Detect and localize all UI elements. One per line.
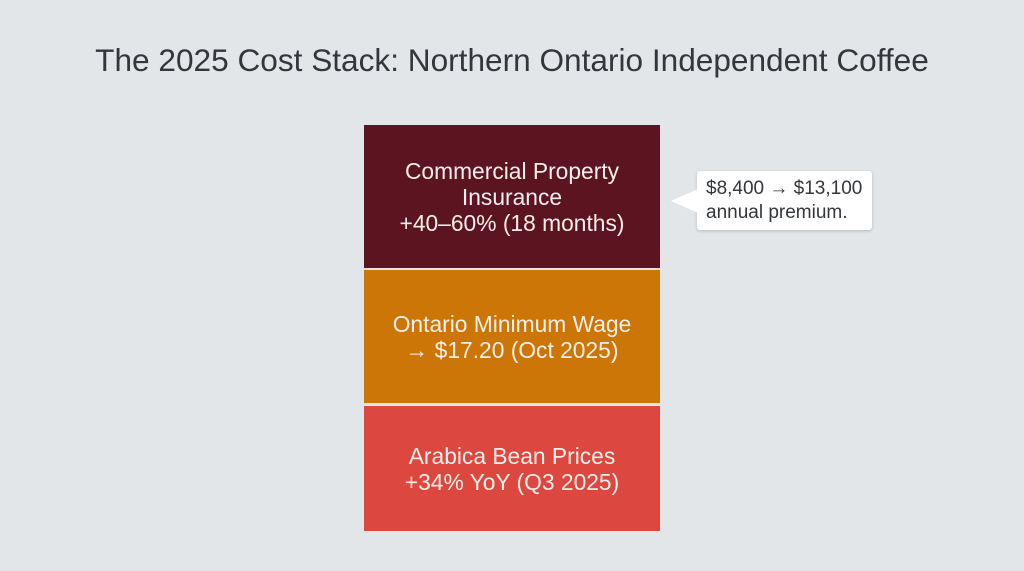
callout: insurance premium	[697, 171, 872, 230]
block: arabica: +34% YoY (Q3 2025)	[405, 468, 619, 494]
block: minimum wage: Ontario Minimum Wage	[393, 310, 631, 336]
block: minimum wage: → $17.20 (Oct 2025)	[406, 336, 618, 362]
callout: insurance premium: $8,400 → $13,100	[706, 178, 862, 199]
block: insurance: +40–60% (18 months)	[400, 210, 624, 236]
block: insurance	[364, 125, 660, 268]
block: arabica	[364, 406, 660, 531]
callout: insurance premium: annual premium.	[706, 202, 848, 223]
block: arabica: Arabica Bean Prices	[409, 442, 615, 468]
title: The 2025 Cost Stack: Northern Ontario Independent Coffee	[95, 42, 929, 78]
block: minimum wage	[364, 270, 660, 403]
block: insurance: Commercial Property	[405, 158, 619, 184]
block: insurance: Insurance	[462, 184, 562, 210]
